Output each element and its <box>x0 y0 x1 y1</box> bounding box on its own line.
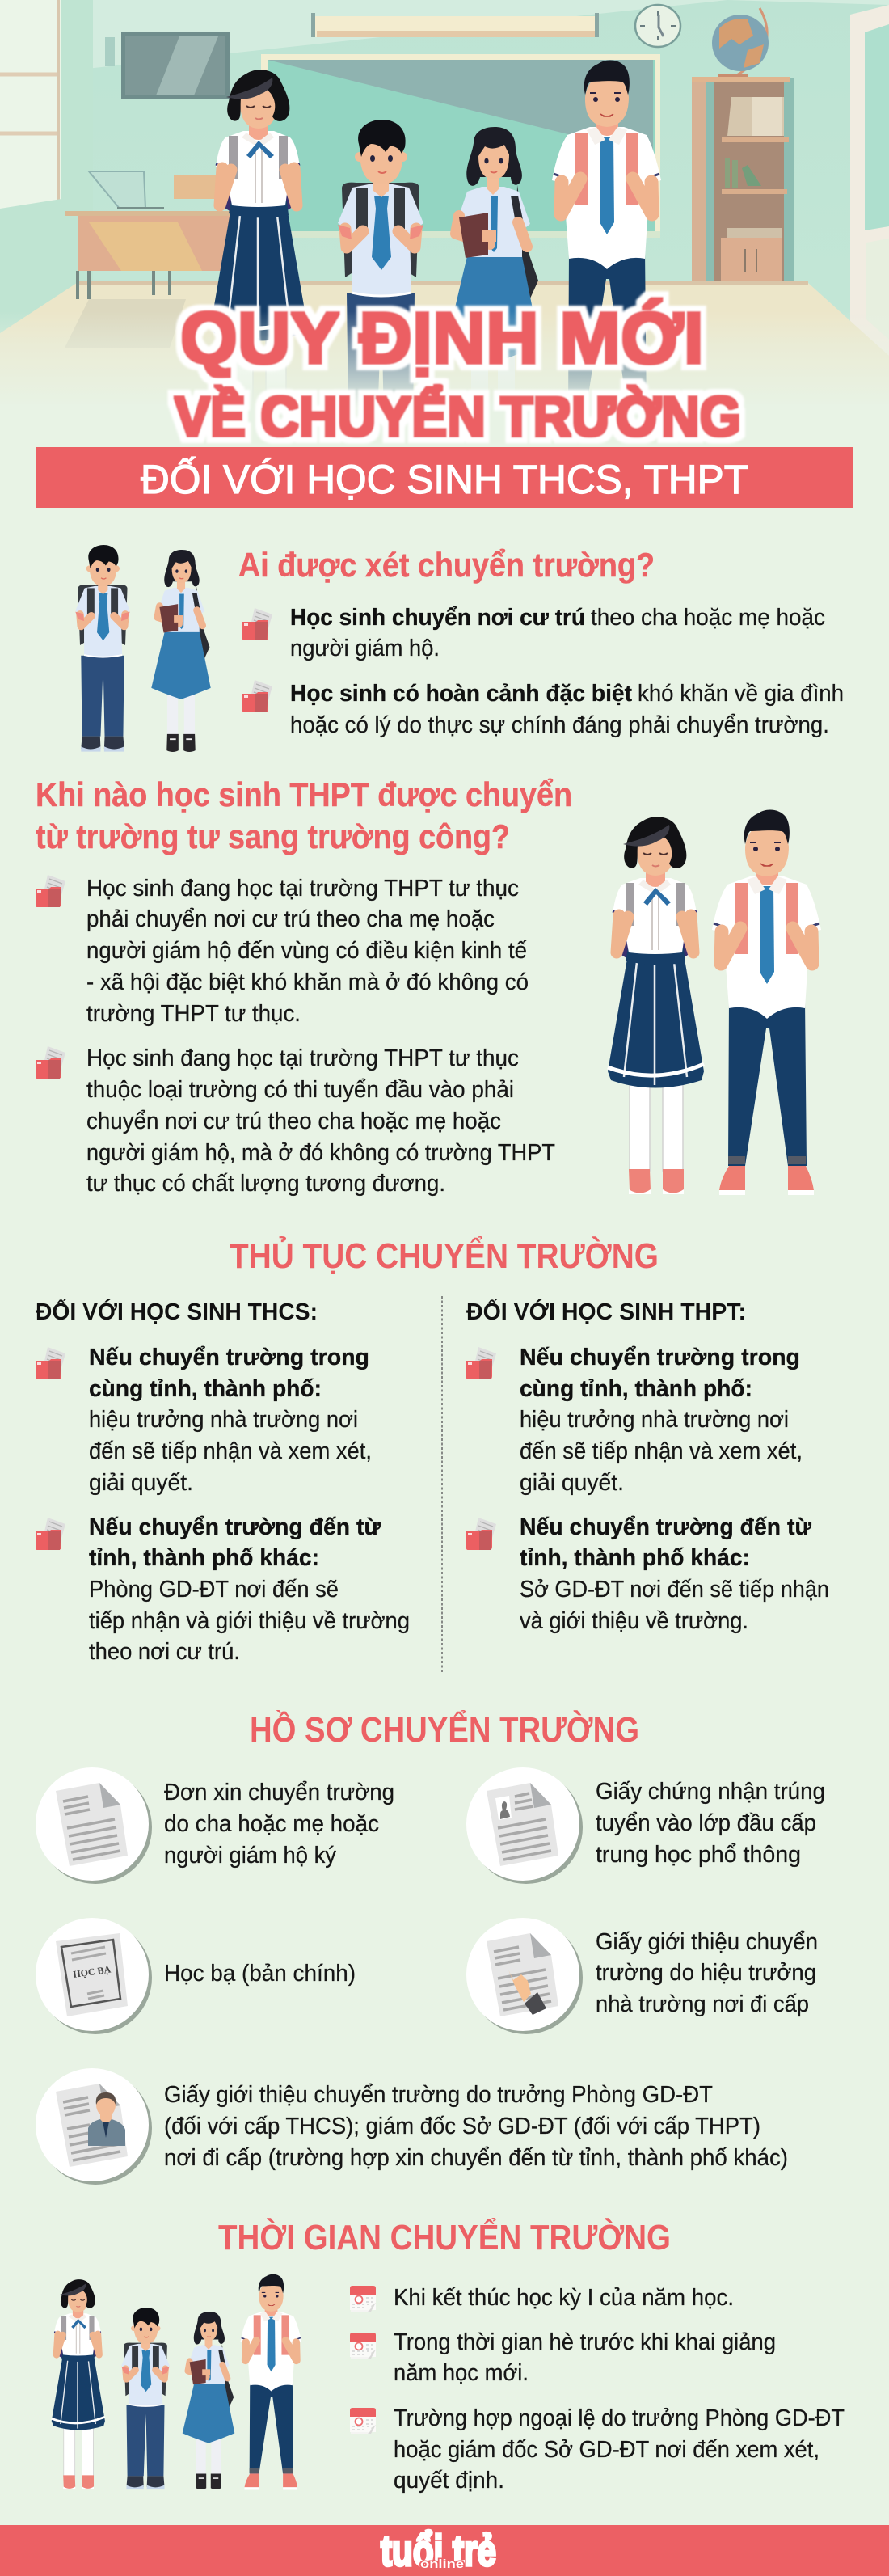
paragraph 1: Học sinh đang học tại trường THPT tư thục <box>86 876 519 902</box>
text: trung học phổ thông <box>596 1842 801 1868</box>
heading: private to public <box>36 775 572 855</box>
paragraph 1: - xã hội đặc biệt khó khăn mà ở đó không có <box>86 969 529 995</box>
hero classroom scene <box>0 0 889 456</box>
icon: ceiling and light rays <box>48 0 889 73</box>
same-province text: đến sẽ tiếp nhận và xem xét, <box>520 1438 803 1464</box>
same-province text: cùng tỉnh, thành phố: <box>520 1376 752 1402</box>
document item: certificate <box>466 1767 825 1884</box>
icon: paper and official portrait <box>36 2068 152 2185</box>
logo: online <box>420 2557 464 2571</box>
icon: folder <box>242 608 272 640</box>
title <box>175 298 741 448</box>
text <box>164 1780 394 1869</box>
text: Trong thời gian hè trước khi khai giảng <box>394 2329 776 2355</box>
text: người giám hộ ký <box>164 1843 336 1869</box>
paragraph 1: trường THPT tư thục. <box>86 1001 301 1027</box>
other-province text: tiếp nhận và giới thiệu về trường <box>89 1608 410 1634</box>
bookshelf <box>692 77 794 288</box>
paragraph 2: chuyển nơi cư trú theo cha hoặc mẹ hoặc <box>86 1109 501 1134</box>
text <box>164 2082 788 2171</box>
illustration: four students <box>52 2274 301 2490</box>
column heading: ĐỐI VỚI HỌC SINH THPT: <box>466 1298 746 1325</box>
other-province text: tỉnh, thành phố khác: <box>520 1545 750 1571</box>
text: do cha hoặc mẹ hoặc <box>164 1811 379 1837</box>
text: Đơn xin chuyển trường <box>164 1780 394 1805</box>
other-province text: Sở GD-ĐT nơi đến sẽ tiếp nhận <box>520 1577 829 1603</box>
text: (đối với cấp THCS); giám đốc Sở GD-ĐT (đối với cấp THPT) <box>164 2114 760 2139</box>
item 1 text: người giám hộ. <box>290 636 440 661</box>
column: THPT <box>466 1298 829 1634</box>
other-province text: Nếu chuyển trường đến từ <box>89 1514 381 1540</box>
same-province text: giải quyết. <box>520 1470 624 1496</box>
floor <box>0 283 889 404</box>
same-province text: cùng tỉnh, thành phố: <box>89 1376 322 1402</box>
icon: folder <box>36 1046 65 1079</box>
student: small girl <box>446 127 540 446</box>
column: THCS <box>36 1298 410 1665</box>
icon: folder <box>36 875 65 907</box>
list: timing <box>350 2285 845 2494</box>
paragraph 1: phải chuyển nơi cư trú theo cha mẹ hoặc <box>86 906 495 932</box>
text: năm học mới. <box>394 2360 529 2386</box>
paragraph 2: người giám hộ, mà ở đó không có trường THPT <box>86 1140 555 1166</box>
paragraph 1: người giám hộ đến vùng có điều kiện kinh tế <box>86 938 527 964</box>
list: private to public <box>36 875 555 1197</box>
globe <box>712 8 769 79</box>
text: hoặc giám đốc Sở GD-ĐT nơi đến xem xét, <box>394 2437 819 2463</box>
paragraph 2: thuộc loại trường có thi tuyển đầu vào phải <box>86 1077 514 1103</box>
other-province text: tỉnh, thành phố khác: <box>89 1545 319 1571</box>
icon: folder <box>242 680 272 712</box>
other-province text: Nếu chuyển trường đến từ <box>520 1514 811 1540</box>
icon: calendar <box>350 2408 376 2434</box>
student: tall girl <box>211 70 307 447</box>
window left <box>0 0 93 340</box>
text: Giấy giới thiệu chuyển trường do trưởng Phòng GD-ĐT <box>164 2082 713 2108</box>
same-province text <box>89 1345 372 1496</box>
illustration: two older students <box>608 809 821 1195</box>
same-province text: hiệu trưởng nhà trường nơi <box>89 1407 358 1433</box>
ceiling light <box>311 13 599 37</box>
paragraph 1 <box>86 876 529 1027</box>
document item: department letter <box>36 2068 788 2185</box>
document item: application <box>36 1767 394 1884</box>
text: nơi đi cấp (trường hợp xin chuyển đến từ tỉnh, thành phố khác) <box>164 2145 788 2171</box>
subtitle band <box>36 447 853 508</box>
heading: who can transfer: Ai được xét chuyển trường? <box>238 546 655 584</box>
icon: folder <box>466 1347 496 1379</box>
item 1 text: theo cha hoặc mẹ hoặc <box>591 605 825 631</box>
student: small boy <box>338 120 423 445</box>
wall clock <box>635 5 680 47</box>
wall TV screen <box>105 32 230 99</box>
laptop and chair on desk <box>89 171 218 209</box>
logo: tuổi trẻ <box>381 2527 496 2575</box>
teacher desk <box>65 211 235 299</box>
title: VỀ CHUYỂN TRƯỜNG <box>175 384 741 448</box>
other-province text <box>89 1514 410 1665</box>
icon: certificate paper with portrait <box>466 1767 583 1884</box>
other-province text <box>520 1514 829 1634</box>
document item: principal letter <box>466 1918 818 2034</box>
other-province text: Phòng GD-ĐT nơi đến sẽ <box>89 1577 339 1603</box>
heading: private to public: từ trường tư sang trường công? <box>36 817 510 855</box>
footer <box>0 2525 889 2576</box>
icon: school record book <box>36 1918 152 2034</box>
chalkboard <box>261 54 660 238</box>
other-province text: theo nơi cư trú. <box>89 1639 240 1665</box>
item 2 text: khó khăn về gia đình <box>638 681 844 707</box>
document item: school record <box>36 1918 356 2034</box>
text <box>394 2405 845 2494</box>
item 2 text: hoặc có lý do thực sự chính đáng phải chuyển trường. <box>290 712 829 738</box>
classroom door <box>850 5 889 356</box>
icon: calendar <box>350 2286 376 2312</box>
paragraph 2: tư thục có chất lượng tương đương. <box>86 1171 445 1197</box>
same-province text: giải quyết. <box>89 1470 193 1496</box>
other-province text: và giới thiệu về trường. <box>520 1608 748 1634</box>
text: nhà trường nơi đi cấp <box>596 1991 809 2017</box>
icon: folder <box>36 1347 65 1379</box>
icon: application paper <box>36 1767 152 1884</box>
text: Giấy giới thiệu chuyển <box>596 1929 818 1955</box>
hero fade overlay <box>0 311 889 456</box>
item 2 text: Học sinh có hoàn cảnh đặc biệt <box>290 681 632 707</box>
text: tuyển vào lớp đầu cấp <box>596 1810 816 1836</box>
student: tall boy <box>552 60 661 446</box>
text <box>596 1779 825 1868</box>
same-province text: Nếu chuyển trường trong <box>520 1345 800 1370</box>
column heading: ĐỐI VỚI HỌC SINH THCS: <box>36 1298 318 1325</box>
subtitle band: ĐỐI VỚI HỌC SINH THCS, THPT <box>141 456 748 502</box>
paragraph 2: Học sinh đang học tại trường THPT tư thục <box>86 1045 519 1071</box>
text: Khi kết thúc học kỳ I của năm học. <box>394 2285 734 2311</box>
text <box>394 2329 776 2386</box>
same-province text: Nếu chuyển trường trong <box>89 1345 369 1370</box>
heading: documents: HỒ SƠ CHUYỂN TRƯỜNG <box>250 1708 639 1750</box>
item 1 text: Học sinh chuyển nơi cư trú <box>290 605 585 631</box>
title: QUY ĐỊNH MỚI <box>180 298 704 379</box>
paragraph 2 <box>86 1045 555 1197</box>
list: who can transfer <box>242 605 844 738</box>
text: Trường hợp ngoại lệ do trưởng Phòng GD-ĐT <box>394 2405 845 2431</box>
heading: timing: THỜI GIAN CHUYỂN TRƯỜNG <box>218 2216 671 2257</box>
icon: school record book: HỌC BẠ <box>72 1964 112 1980</box>
text: quyết định. <box>394 2468 504 2494</box>
text: trường do hiệu trưởng <box>596 1960 816 1986</box>
item 1 text <box>290 605 825 661</box>
heading: procedure: THỦ TỤC CHUYỂN TRƯỜNG <box>230 1235 659 1276</box>
icon: folder <box>36 1518 65 1550</box>
heading: private to public: Khi nào học sinh THPT được chuyển <box>36 775 572 813</box>
icon: folder <box>466 1518 496 1550</box>
text: Giấy chứng nhận trúng <box>596 1779 825 1805</box>
item 2 text <box>290 681 844 738</box>
same-province text: hiệu trưởng nhà trường nơi <box>520 1407 789 1433</box>
same-province text: đến sẽ tiếp nhận và xem xét, <box>89 1438 372 1464</box>
icon: calendar <box>350 2333 376 2359</box>
text <box>596 1929 818 2017</box>
icon: paper and pointing hand <box>466 1918 583 2034</box>
text: Học bạ (bản chính) <box>164 1961 356 1987</box>
illustration: two students, section 1 <box>75 545 211 752</box>
same-province text <box>520 1345 803 1496</box>
